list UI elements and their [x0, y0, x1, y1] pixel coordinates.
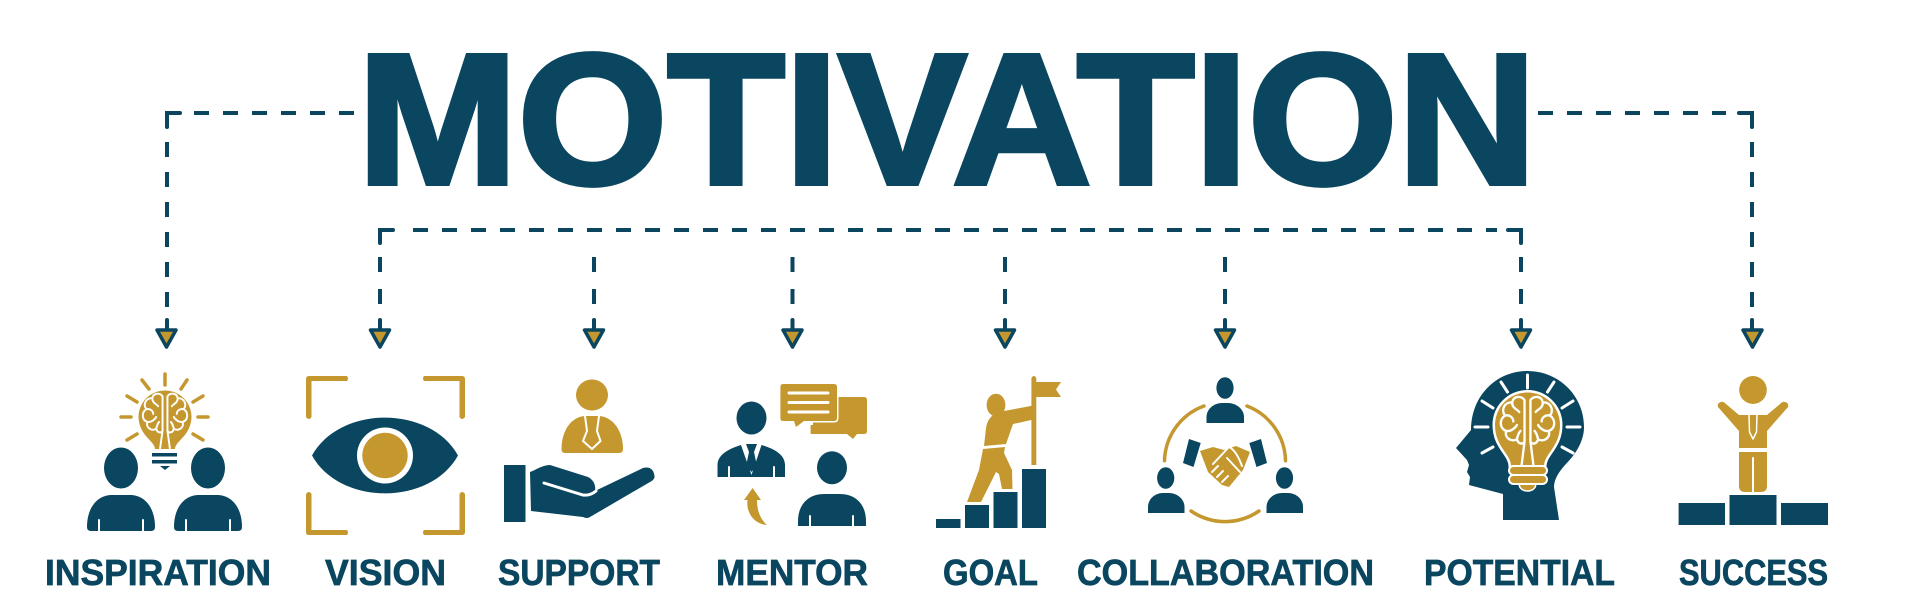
label: success: SUCCESS [1679, 552, 1828, 593]
arrow: horizontal connector to vision and potential [380, 230, 1521, 243]
label: collaboration: COLLABORATION [1077, 552, 1374, 593]
icon: inspiration [87, 374, 242, 531]
label: potential: POTENTIAL [1424, 552, 1615, 593]
label: goal: GOAL [943, 552, 1038, 593]
icon: mentor [718, 384, 867, 526]
icon: success [1679, 376, 1828, 525]
arrow: to potential [1512, 257, 1530, 347]
arrow: to vision [370, 257, 390, 347]
arrow: to mentor [783, 257, 802, 347]
icon: goal [936, 376, 1061, 528]
label: inspiration: INSPIRATION [45, 552, 271, 593]
arrow: to goal [996, 257, 1014, 347]
arrow: to collaboration [1216, 257, 1234, 347]
title: MOTIVATION [358, 16, 1536, 224]
icon: vision [306, 376, 465, 535]
label: support: SUPPORT [498, 552, 660, 593]
label: vision: VISION [325, 552, 446, 593]
icon: potential [1456, 371, 1584, 520]
icon: collaboration [1148, 377, 1303, 522]
arrow: to support [584, 257, 604, 347]
label: mentor: MENTOR [716, 552, 868, 593]
arrow: to inspiration [157, 113, 354, 347]
arrow: to success [1538, 113, 1762, 347]
icon: support [504, 380, 655, 522]
